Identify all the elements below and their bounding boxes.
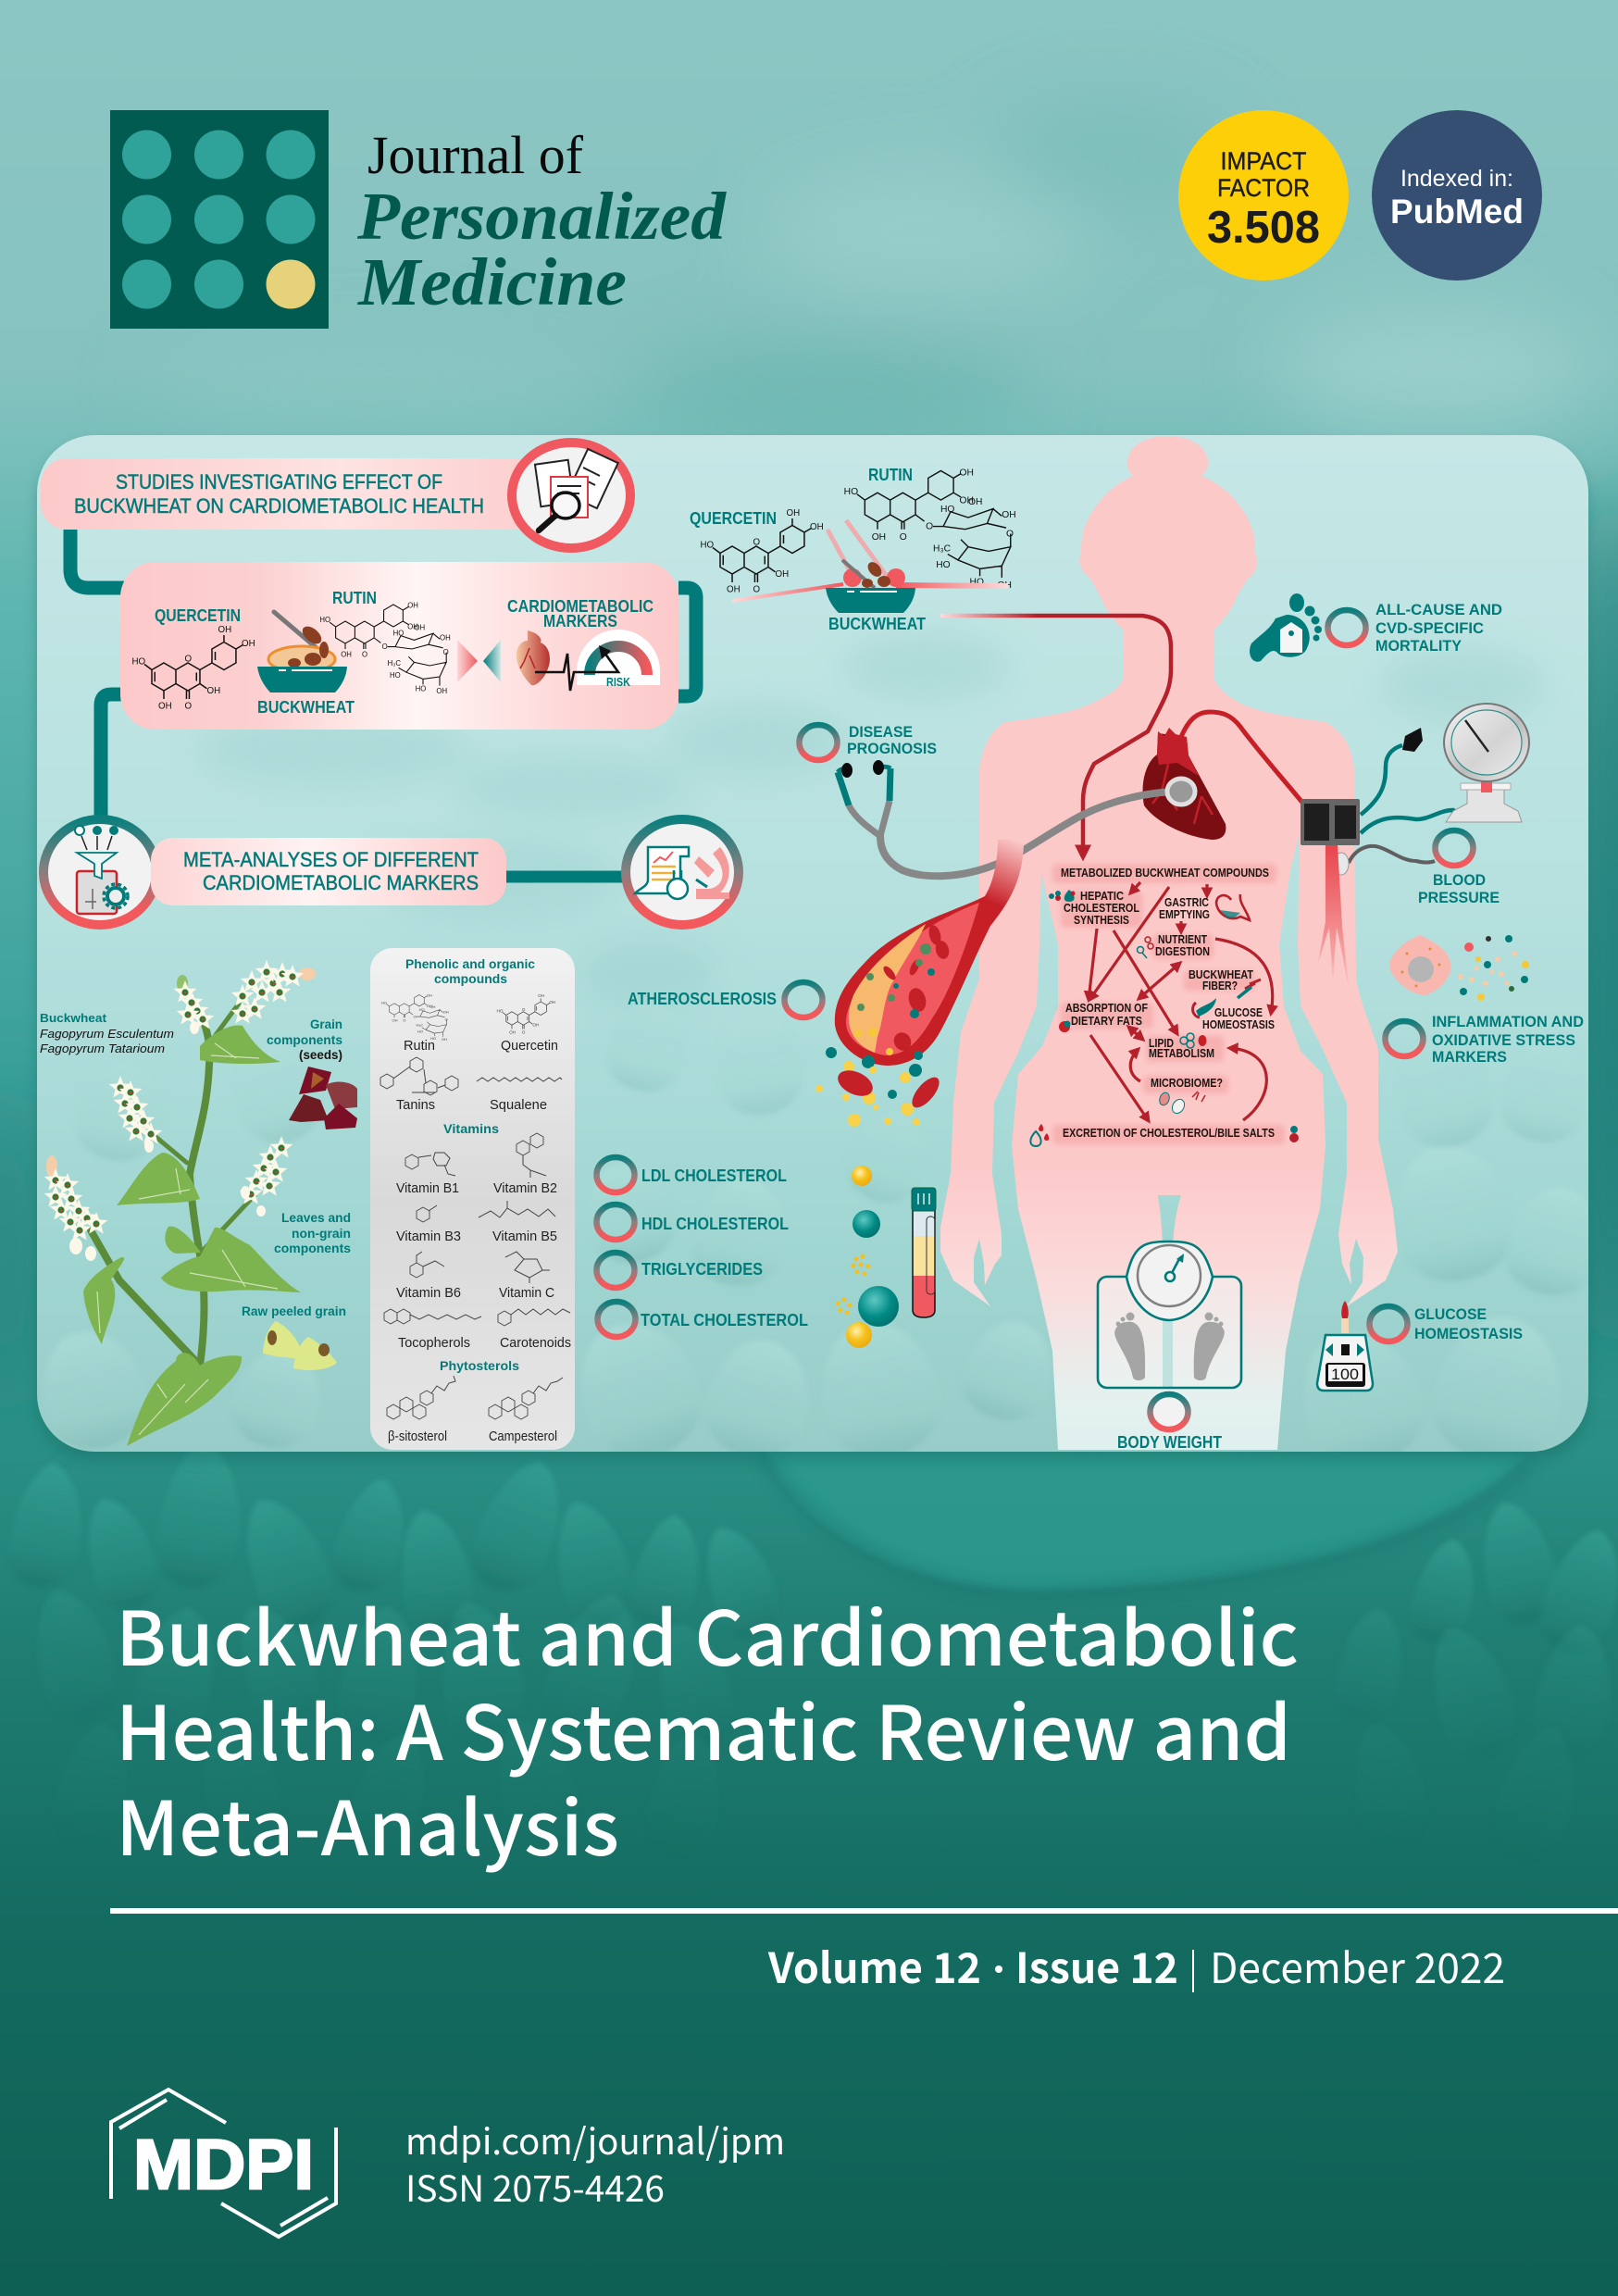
compound names: Carotenoids — [500, 1336, 571, 1351]
plant labels: Fagopyrum Esculentum — [40, 1027, 174, 1041]
pathway labels: FIBER? — [1202, 980, 1238, 992]
silhouette: body — [940, 437, 1398, 1450]
issue line: Issue 12 — [1015, 1935, 1178, 1995]
label: inflammation: MARKERS — [1432, 1049, 1507, 1066]
article title — [116, 1579, 1299, 1878]
molecule group: top rutin — [844, 466, 1016, 591]
pathway labels: EXCRETION OF CHOLESTEROL/BILE SALTS — [1063, 1127, 1275, 1140]
bowl with glowing pink lines — [732, 520, 1008, 613]
compound names: Squalene — [490, 1098, 547, 1113]
molecule group: top quercetin — [690, 508, 824, 594]
legend: cholesterol markers: TRIGLYCERIDES — [641, 1260, 763, 1279]
impact factor badge — [1178, 110, 1349, 281]
banner: meta-analyses — [151, 838, 506, 905]
compound names: Vitamin B3 — [396, 1229, 461, 1244]
pathway labels: METABOLISM — [1149, 1047, 1214, 1060]
icon: glucose meter: 100 — [1331, 1366, 1359, 1383]
journal title: Journal of — [367, 125, 584, 185]
label: disease prognosis: DISEASE — [849, 724, 913, 741]
compound names: Campesterol — [489, 1429, 557, 1444]
label: inflammation: INFLAMMATION AND — [1432, 1014, 1584, 1030]
icon: report flask microscope — [626, 819, 739, 925]
plant: buckwheat — [44, 960, 316, 1446]
pathway labels: GASTRIC — [1164, 896, 1209, 909]
plant labels: (seeds) — [299, 1048, 342, 1062]
legend: cholesterol markers: HDL CHOLESTEROL — [641, 1215, 789, 1233]
compound names — [388, 1039, 571, 1444]
banner: meta-analyses: META-ANALYSES OF DIFFERENT — [183, 848, 479, 871]
label: disease prognosis — [800, 724, 937, 760]
pathway labels: BUCKWHEAT — [1189, 968, 1253, 981]
pathway arrows — [1089, 882, 1273, 1121]
plant labels: Fagopyrum Tatarioum — [40, 1042, 165, 1055]
box: buckwheat compounds and markers: QUERCETIN — [155, 606, 241, 625]
label: mortality: ALL-CAUSE AND — [1375, 602, 1502, 618]
pathway labels: MICROBIOME? — [1151, 1077, 1223, 1090]
risk gauge — [535, 630, 660, 691]
flowers: middle right — [240, 1136, 292, 1217]
plant labels: components — [267, 1033, 342, 1047]
stems — [91, 1004, 255, 1366]
journal url and issn — [405, 2114, 785, 2213]
impact factor badge: 3.508 — [1207, 203, 1320, 253]
molecule: quercetin — [131, 625, 255, 711]
panel: compounds list: compounds — [434, 972, 507, 986]
inflammation cell and particles — [1389, 935, 1529, 1001]
particles: blood cells and lipids — [815, 1047, 944, 1127]
icon: heart — [1143, 728, 1226, 840]
panel: compounds list: Phenolic and organic — [405, 957, 535, 971]
panel shadow — [37, 444, 1588, 1461]
artery line: buckwheat to metabolism — [940, 616, 1171, 857]
icon: raw peeled grain — [263, 1321, 337, 1370]
banner: meta-analyses: CARDIOMETABOLIC MARKERS — [203, 871, 479, 894]
pathway labels: HEPATIC — [1080, 890, 1124, 903]
flowers: top right — [231, 960, 316, 1024]
pathway labels — [1061, 867, 1275, 1140]
chevrons — [457, 640, 501, 682]
compound names: Vitamin C — [499, 1286, 554, 1301]
plant labels: Raw peeled grain — [242, 1304, 346, 1318]
artery: aorta to arm — [1181, 712, 1303, 804]
background: bowl and grain stones — [2, 1439, 1618, 1869]
plant labels: components — [274, 1242, 351, 1255]
MDPI logo — [111, 2090, 336, 2237]
pathway labels: DIETARY FATS — [1071, 1015, 1142, 1028]
article title: Buckwheat and Cardiometabolic — [116, 1579, 1299, 1688]
risk gauge: RISK — [606, 676, 630, 689]
pathway labels: DIGESTION — [1155, 945, 1210, 958]
label: atherosclerosis: ATHEROSCLEROSIS — [628, 990, 777, 1008]
connectors — [70, 530, 696, 877]
plant labels: Grain — [310, 1017, 342, 1031]
legend: cholesterol markers — [596, 1157, 808, 1337]
label: body weight — [1117, 1394, 1222, 1452]
journal url and issn: mdpi.com/journal/jpm — [405, 2114, 785, 2165]
panel: compounds list: Phytosterols — [440, 1359, 519, 1373]
icon: pressure dial tube — [1334, 846, 1435, 875]
indexed in pubmed badge: PubMed — [1390, 193, 1524, 231]
leaves — [83, 1025, 301, 1446]
issue line: December 2022 — [1210, 1935, 1505, 1995]
label: inflammation: OXIDATIVE STRESS — [1432, 1032, 1575, 1049]
flowers: middle left — [109, 1076, 162, 1153]
journal url and issn: ISSN 2075-4426 — [405, 2161, 665, 2213]
pathway labels: LIPID — [1149, 1037, 1174, 1050]
panel: compounds list — [370, 948, 575, 1450]
compound names: β-sitosterol — [388, 1429, 447, 1444]
journal title: Medicine — [357, 244, 627, 319]
diagram: metabolic pathways — [1030, 864, 1299, 1146]
impact factor badge: FACTOR — [1217, 174, 1310, 202]
plant labels — [40, 1012, 351, 1318]
leaf veins — [97, 1043, 278, 1435]
molecule: rutin — [319, 602, 451, 695]
label: atherosclerosis — [628, 982, 822, 1017]
label: blood pressure: BLOOD — [1433, 872, 1486, 889]
pathway labels: ABSORPTION OF — [1065, 1002, 1148, 1015]
label: glucose homeostasis — [1370, 1306, 1523, 1342]
icon: blood sample tube — [912, 1188, 936, 1317]
compound names: Tocopherols — [398, 1336, 470, 1351]
article title: Meta-Analysis — [116, 1769, 619, 1878]
panel: compounds list: Vitamins — [443, 1122, 499, 1136]
icon: small heart — [517, 630, 550, 685]
icon: funnel and gear — [44, 819, 156, 925]
compound names: Vitamin B6 — [396, 1286, 461, 1301]
flowers: left — [44, 1155, 107, 1261]
icon: glucose meter — [1317, 1301, 1373, 1391]
molecule group: top quercetin: QUERCETIN — [690, 509, 777, 528]
compound names: Tanins — [396, 1098, 435, 1113]
icon: footprint with house — [1250, 593, 1322, 662]
pathway labels: METABOLIZED BUCKWHEAT COMPOUNDS — [1061, 867, 1269, 880]
impact factor badge: IMPACT — [1220, 147, 1307, 175]
indexed in pubmed badge: Indexed in: — [1400, 166, 1513, 192]
label: glucose homeostasis: HOMEOSTASIS — [1414, 1326, 1523, 1342]
pathway icons — [1030, 890, 1299, 1146]
bowl of buckwheat — [257, 612, 347, 693]
compound names: Rutin — [404, 1039, 435, 1054]
journal title: Personalized — [356, 179, 728, 254]
compound names: Quercetin — [501, 1039, 558, 1054]
label: buckwheat: BUCKWHEAT — [828, 615, 926, 633]
label boxes — [1052, 864, 1285, 1144]
flowers: top middle — [174, 975, 214, 1034]
label: mortality: MORTALITY — [1375, 638, 1462, 655]
artery with plaque — [835, 840, 1024, 1066]
compound names: Vitamin B2 — [493, 1181, 557, 1196]
right arm artery — [1318, 845, 1350, 995]
molecule group: top rutin: RUTIN — [868, 466, 913, 484]
icon: stethoscope — [838, 760, 1195, 876]
banner: studies: STUDIES INVESTIGATING EFFECT OF — [116, 470, 442, 493]
journal title — [356, 125, 728, 319]
pathway labels: NUTRIENT — [1158, 933, 1207, 946]
lipid balls — [835, 1166, 899, 1348]
indexed in pubmed badge — [1372, 110, 1542, 281]
box: buckwheat compounds and markers: RUTIN — [332, 589, 377, 607]
box: buckwheat compounds and markers: BUCKWHEAT — [257, 698, 355, 717]
journal logo — [110, 110, 329, 329]
icon: sphygmomanometer — [1301, 704, 1529, 845]
compound names: Vitamin B1 — [396, 1181, 459, 1196]
compound names: Vitamin B5 — [492, 1229, 557, 1244]
plant labels: Leaves and — [281, 1211, 351, 1225]
issue line: Volume 12 — [767, 1935, 981, 1995]
article title: Health: A Systematic Review and — [116, 1674, 1291, 1782]
pathway labels: HOMEOSTASIS — [1202, 1018, 1275, 1031]
banner: studies — [41, 458, 587, 530]
label: disease prognosis: PROGNOSIS — [847, 741, 937, 757]
banner: studies: BUCKWHEAT ON CARDIOMETABOLIC HEALTH — [74, 494, 484, 518]
box: buckwheat compounds and markers: CARDIOMETABOLIC — [507, 597, 653, 616]
icon: buckwheat seeds — [289, 1067, 357, 1129]
legend: cholesterol markers: LDL CHOLESTEROL — [641, 1167, 787, 1185]
legend: cholesterol markers: TOTAL CHOLESTEROL — [641, 1311, 808, 1329]
label: mortality: CVD-SPECIFIC — [1375, 620, 1484, 637]
label: blood pressure: PRESSURE — [1418, 890, 1500, 906]
molecule drawings — [380, 992, 570, 1419]
plant labels: Buckwheat — [40, 1012, 107, 1025]
pathway labels: SYNTHESIS — [1074, 914, 1129, 927]
icon: papers and magnifier — [512, 443, 630, 548]
issue line — [767, 1935, 1505, 1995]
label: glucose homeostasis: GLUCOSE — [1414, 1306, 1487, 1323]
label: body weight: BODY WEIGHT — [1117, 1433, 1222, 1452]
label: mortality — [1327, 602, 1502, 655]
pathway labels: GLUCOSE — [1214, 1006, 1263, 1019]
box: buckwheat compounds and markers: MARKERS — [543, 612, 617, 630]
label: blood pressure — [1418, 830, 1500, 906]
plant labels: non-grain — [292, 1227, 351, 1241]
panel: infographic — [31, 435, 1615, 1479]
pathway labels: EMPTYING — [1159, 908, 1210, 921]
pathway labels: CHOLESTEROL — [1064, 902, 1139, 915]
icon: weighing scale — [1098, 1242, 1241, 1388]
box: buckwheat compounds and markers — [120, 562, 678, 730]
MDPI logo: MDPI — [133, 2126, 314, 2204]
label: inflammation — [1385, 1014, 1584, 1066]
divider rule — [110, 1908, 1618, 1914]
